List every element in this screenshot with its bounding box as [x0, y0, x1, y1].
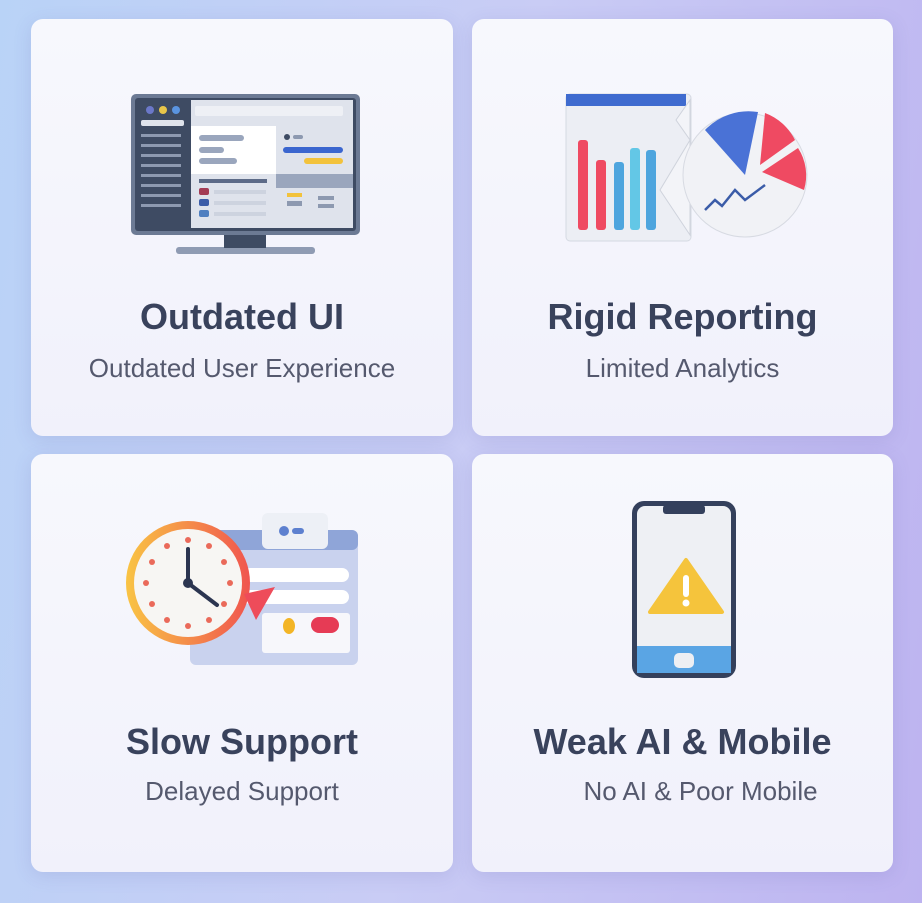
subtitle: Delayed Support	[145, 776, 339, 806]
panel: weak AI & mobile	[472, 454, 893, 872]
icon: broken chart with pie	[566, 94, 807, 241]
subtitle: Limited Analytics	[586, 353, 779, 383]
panel: rigid reporting	[472, 19, 893, 436]
subtitle: No AI & Poor Mobile	[583, 776, 818, 806]
title: Slow Support: Slow Support	[126, 721, 358, 762]
icon: clock with support window	[126, 513, 358, 665]
title: Rigid Reporting: Rigid Reporting	[548, 296, 817, 337]
panel: outdated UI	[31, 19, 453, 436]
icon: phone with warning	[632, 501, 736, 678]
subtitle: Outdated User Experience	[89, 353, 395, 383]
panel: slow support	[31, 454, 453, 872]
icon: monitor	[131, 94, 360, 254]
title: Outdated UI: Outdated UI	[140, 296, 344, 337]
title: Weak AI & Mobile: Weak AI & Mobile	[533, 721, 832, 762]
